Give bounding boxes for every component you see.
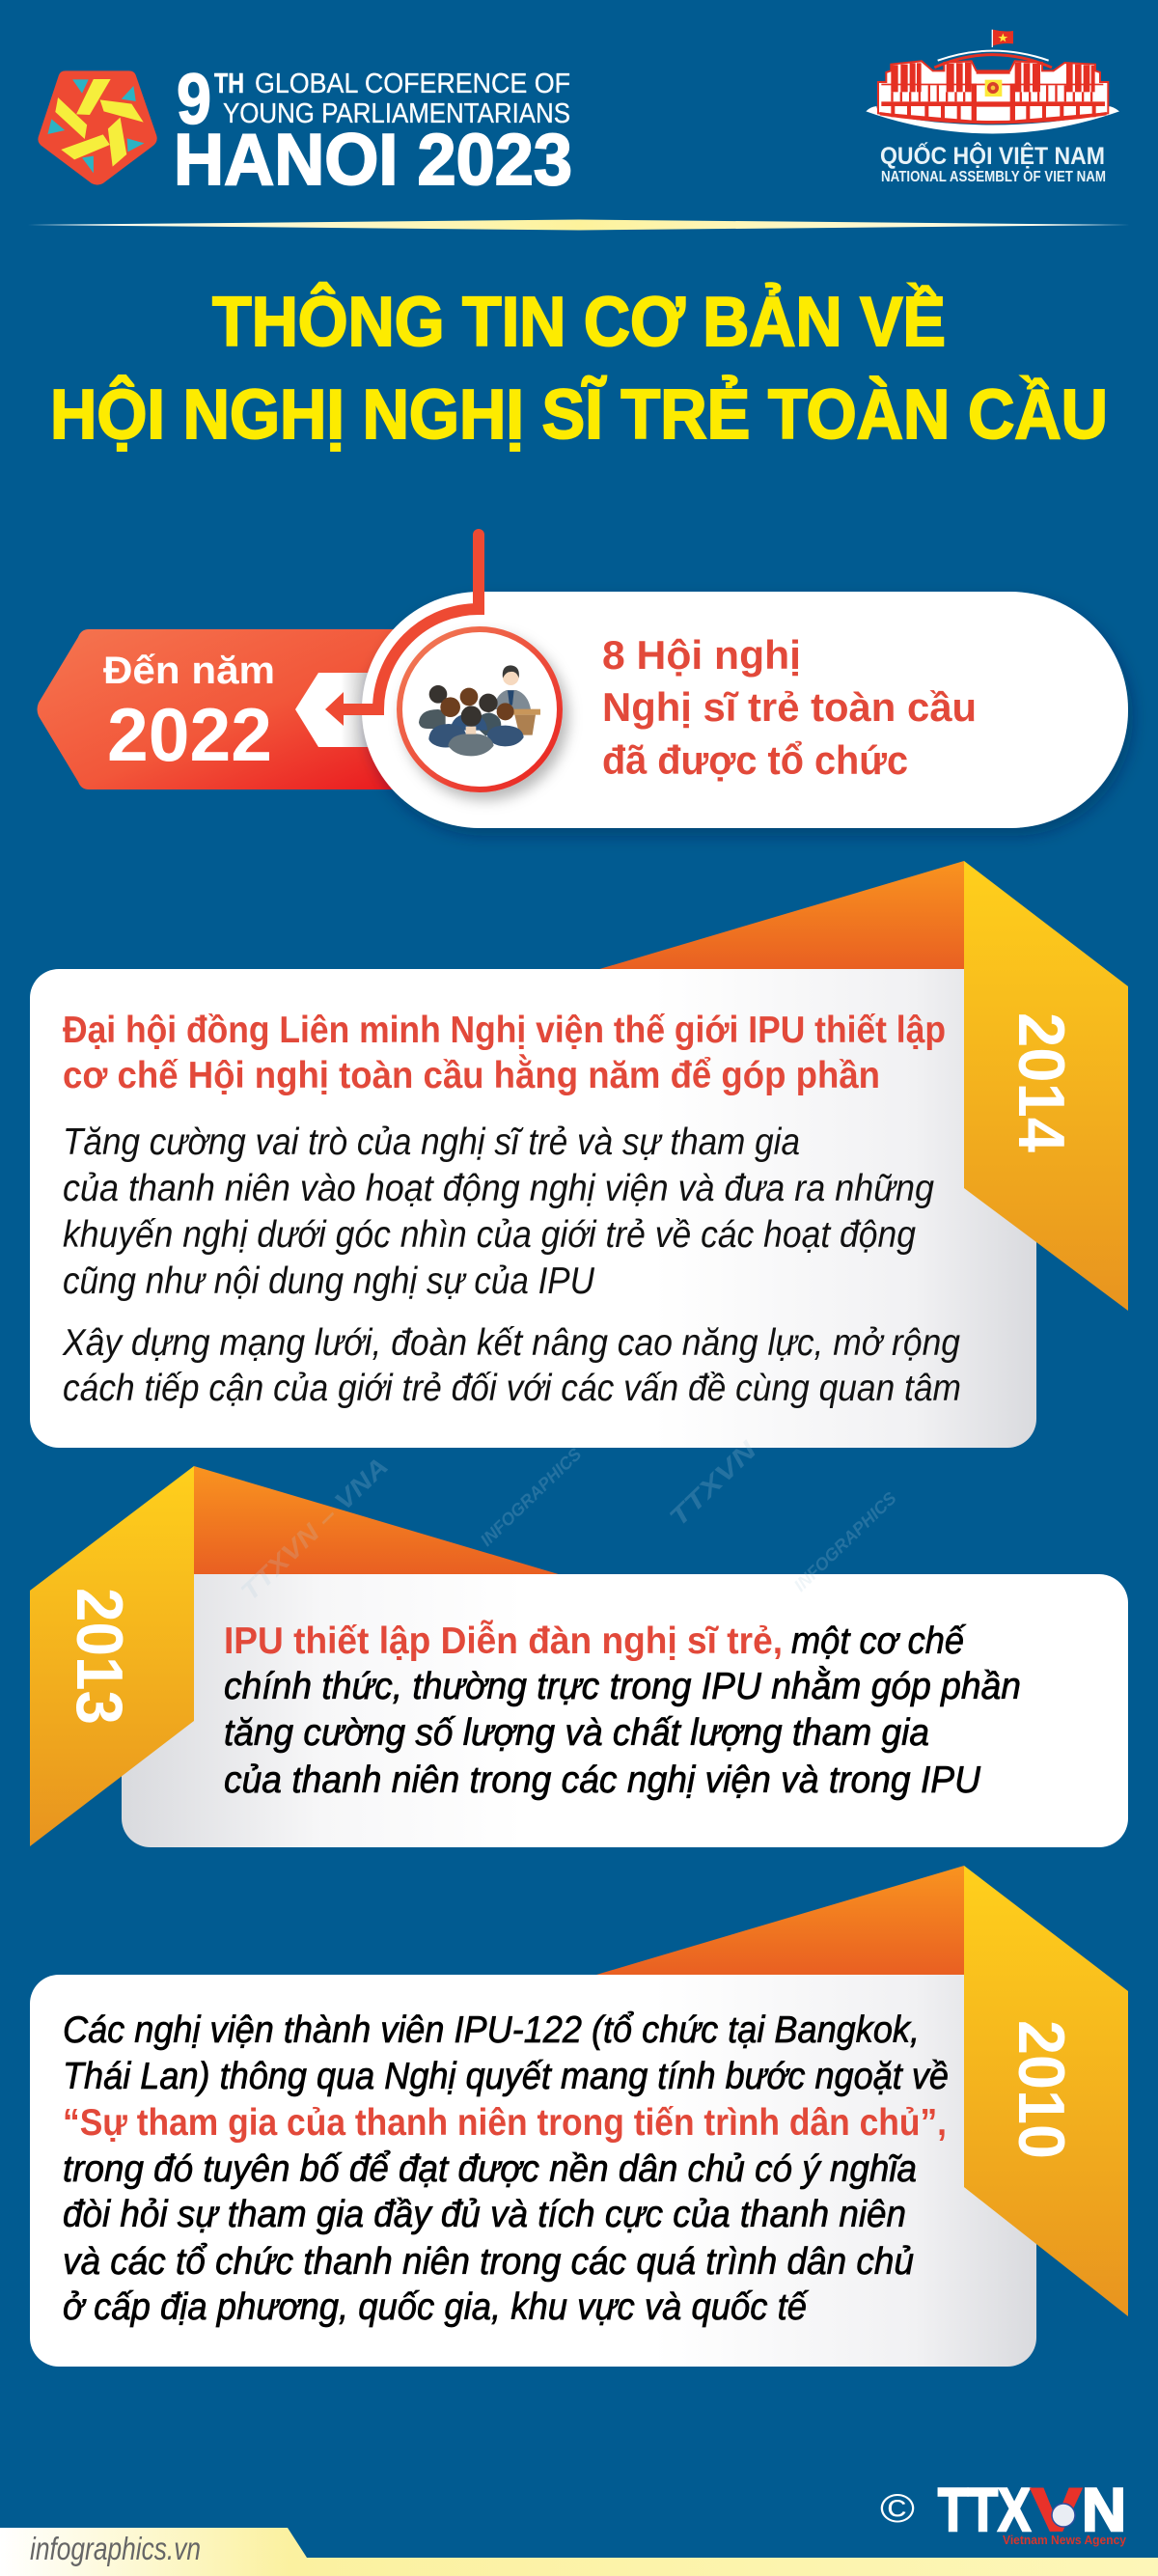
logo text: 9: [177, 59, 211, 139]
arrow: red connector line: [325, 529, 484, 726]
title: THÔNG TIN CƠ BẢN VỀ: [212, 283, 946, 361]
watermarks: TTXVN: [663, 1434, 763, 1532]
pill: white card: [362, 592, 1128, 828]
ribbon: [30, 1466, 194, 1846]
panel: by 2022: [37, 529, 1128, 828]
logo subtitle: NATIONAL ASSEMBLY OF VIET NAM: [881, 169, 1106, 185]
banner: year 2022: Đến năm: [103, 650, 275, 692]
text block: chính thức, thường trực trong IPU nhằm góp phần: [224, 1666, 1021, 1707]
text block: Tăng cường vai trò của nghị sĩ trẻ và sự tham gia: [63, 1122, 800, 1163]
TTXVN wordmark: V: [1031, 2477, 1082, 2544]
text: 8 conferences held: [602, 632, 977, 783]
text block: Thái Lan) thông qua Nghị quyết mang tính bước ngoặt về: [63, 2056, 949, 2097]
icon: parliament building with flag: [866, 30, 1119, 133]
text block: [63, 2009, 949, 2328]
footer band: [0, 2528, 1158, 2576]
text block: cũng như nội dung nghị sự của IPU: [63, 1260, 595, 1302]
header logo: National Assembly of Viet Nam: [866, 30, 1119, 185]
heading: cơ chế Hội nghị toàn cầu hằng năm để góp phần: [63, 1054, 880, 1096]
title: HỘI NGHỊ NGHỊ SĨ TRẺ TOÀN CẦU: [50, 375, 1108, 454]
card: [30, 1975, 1036, 2367]
text block: Xây dựng mạng lưới, đoàn kết nâng cao năng lực, mở rộng: [62, 1322, 960, 1364]
card: [30, 969, 1036, 1448]
icon: pentagon star logo: [38, 70, 157, 185]
text block: “Sự tham gia của thanh niên trong tiến trình dân chủ”,: [63, 2102, 947, 2144]
logo text: HANOI 2023: [174, 119, 572, 200]
icon: ring with meeting people: [400, 629, 560, 789]
text block: Các nghị viện thành viên IPU-122 (tổ chức tại Bangkok,: [63, 2009, 920, 2051]
text block: của thanh niên vào hoạt động nghị viện và đưa ra những: [63, 1168, 934, 1209]
ribbon fold: [194, 1466, 562, 1579]
footer agency logo: [880, 2477, 1127, 2547]
year: 2013: [63, 1588, 136, 1725]
year: 2010: [1005, 2020, 1078, 2159]
panel: 2013: [30, 1466, 1128, 1847]
ribbon fold: [596, 861, 964, 975]
text: 8 conferences held: Nghị sĩ trẻ toàn cầu: [602, 684, 977, 730]
icon: speaker and audience: [419, 665, 540, 756]
text block: tăng cường số lượng và chất lượng tham gia: [224, 1712, 929, 1754]
text block: khuyến nghị dưới góc nhìn của giới trẻ về các hoạt động: [63, 1214, 916, 1256]
arrow: white chevron: [295, 673, 372, 747]
watermarks: TTXVN – VNA: [234, 1452, 394, 1606]
agency subtitle: Vietnam News Agency: [1003, 2533, 1127, 2547]
text block: [224, 1620, 1021, 1801]
banner: year 2022: [37, 629, 405, 789]
text block: của thanh niên trong các nghị viện và trong IPU: [224, 1759, 981, 1801]
text: 8 conferences held: 8 Hội nghị: [602, 632, 801, 678]
logo text: YOUNG PARLIAMENTARIANS: [223, 98, 570, 129]
footer website: infographics.vn: [30, 2531, 201, 2566]
heading: [63, 1010, 946, 1096]
ribbon: [964, 1866, 1128, 2316]
heading: Đại hội đồng Liên minh Nghị viện thế giới IPU thiết lập: [63, 1010, 946, 1051]
logo text: GLOBAL COFERENCE OF: [255, 69, 570, 99]
banner: year 2022: 2022: [107, 692, 272, 777]
text: 8 conferences held: đã được tổ chức: [602, 737, 908, 783]
text block: một cơ chế: [791, 1620, 966, 1662]
watermarks: INFOGRAPHICS: [790, 1488, 900, 1595]
TTXVN wordmark: [938, 2477, 1126, 2544]
panel: 2014: [30, 861, 1128, 1448]
year: 2014: [1005, 1012, 1078, 1152]
panel: 2010: [30, 1866, 1128, 2367]
text block: trong đó tuyên bố để đạt được nền dân chủ có ý nghĩa: [63, 2148, 917, 2190]
divider: [28, 220, 1130, 230]
watermarks: INFOGRAPHICS: [477, 1444, 585, 1550]
text block: đòi hỏi sự tham gia đầy đủ và tích cực của thanh niên: [63, 2194, 906, 2235]
title: [50, 283, 1108, 454]
logo text: [174, 59, 572, 200]
text block: cách tiếp cận của giới trẻ đối với các vấn đề cùng quan tâm: [63, 1368, 961, 1409]
text block: [62, 1122, 961, 1409]
copyright symbol: ©: [880, 2485, 915, 2531]
ribbon: [964, 861, 1128, 1311]
TTXVN wordmark: N: [1082, 2477, 1126, 2544]
text block: ở cấp địa phương, quốc gia, khu vực và quốc tế: [63, 2286, 809, 2328]
watermarks: [234, 1434, 900, 1606]
ribbon fold: [596, 1866, 964, 1980]
logo text: QUỐC HỘI VIỆT NAM: [880, 141, 1105, 170]
text block: IPU thiết lập Diễn đàn nghị sĩ trẻ,: [224, 1620, 783, 1662]
logo text: TH: [214, 69, 244, 99]
TTXVN wordmark: TTX: [938, 2477, 1031, 2544]
text block: và các tổ chức thanh niên trong các quá trình dân chủ: [63, 2241, 914, 2283]
header logo: 9th Global Conference: [38, 59, 572, 200]
card: [122, 1574, 1128, 1847]
